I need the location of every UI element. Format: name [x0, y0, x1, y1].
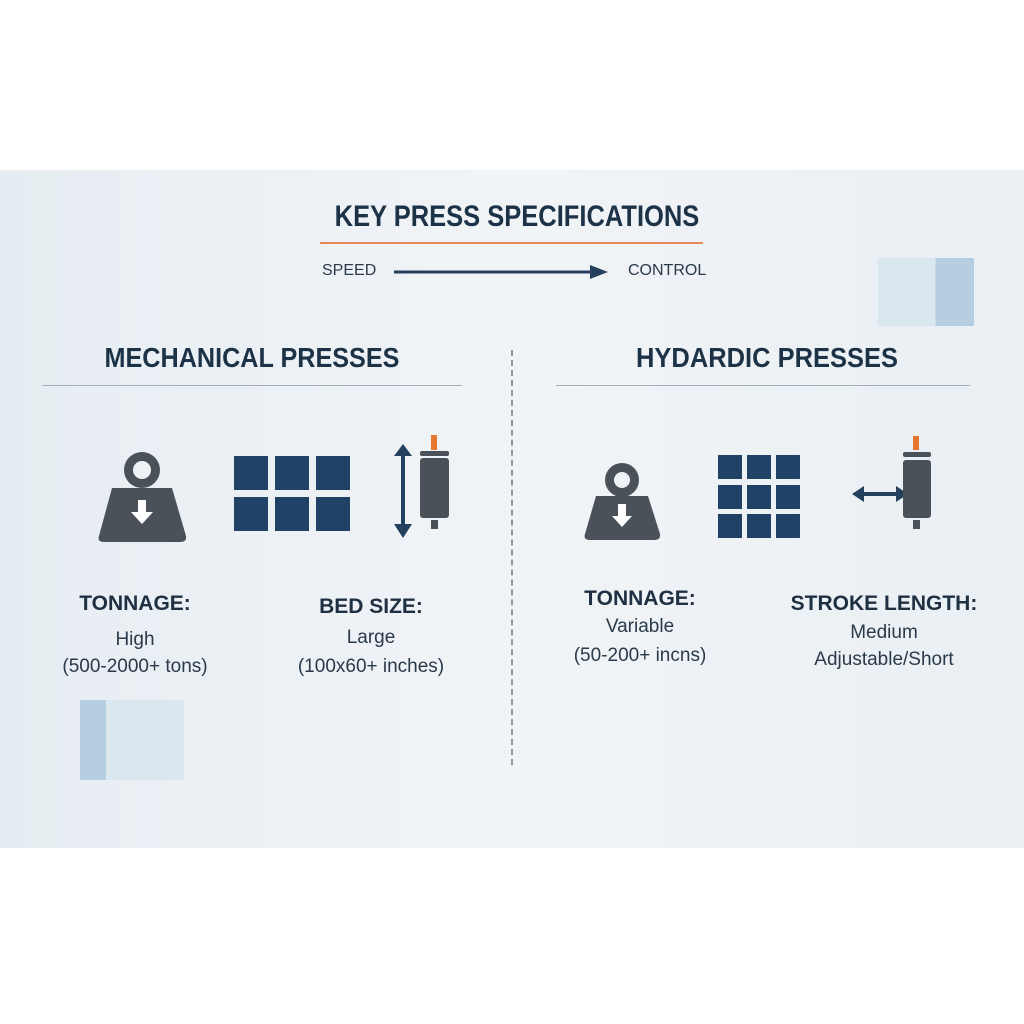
icon: cylinder with horizontal arrow: [852, 436, 931, 529]
text: tonnage left: (500-2000+ tons): [62, 656, 208, 677]
icons right: [584, 436, 931, 540]
decorative blocks right: [878, 258, 974, 326]
icon: grid 3x3: [718, 455, 800, 538]
divider: [511, 350, 513, 765]
text: tonnage left: High: [115, 629, 155, 650]
text: tonnage left: [62, 592, 208, 677]
text: tonnage right: [574, 587, 706, 666]
text: bed size: Large: [347, 627, 395, 648]
background panel: [0, 170, 1024, 848]
heading: hydraulic: HYDARDIC PRESSES: [636, 342, 898, 373]
text: bed size: (100x60+ inches): [298, 656, 444, 677]
text: bed size: [298, 595, 444, 677]
text: tonnage right: (50-200+ incns): [574, 645, 706, 666]
text: stroke length: Medium: [850, 622, 918, 643]
icon: weight: [99, 452, 186, 542]
speed to control arrow: [322, 262, 706, 279]
title: KEY PRESS SPECIFICATIONS: [335, 200, 699, 233]
text: tonnage right: TONNAGE:: [584, 587, 696, 610]
icon: cylinder with vertical arrow: [394, 435, 449, 538]
text: tonnage right: Variable: [606, 616, 674, 637]
text: bed size: BED SIZE:: [319, 595, 423, 618]
icon: weight: [585, 463, 660, 540]
text: stroke length: Adjustable/Short: [814, 649, 954, 670]
decorative blocks left: [80, 700, 184, 780]
speed to control arrow: CONTROL: [628, 262, 706, 279]
text: stroke length: STROKE LENGTH:: [791, 592, 977, 615]
heading: mechanical: MECHANICAL PRESSES: [105, 342, 399, 373]
text: stroke length: [791, 592, 977, 670]
icons left: [98, 435, 449, 542]
text: tonnage left: TONNAGE:: [79, 592, 191, 615]
speed to control arrow: SPEED: [322, 262, 376, 279]
icon: grid 3x2: [234, 456, 350, 531]
